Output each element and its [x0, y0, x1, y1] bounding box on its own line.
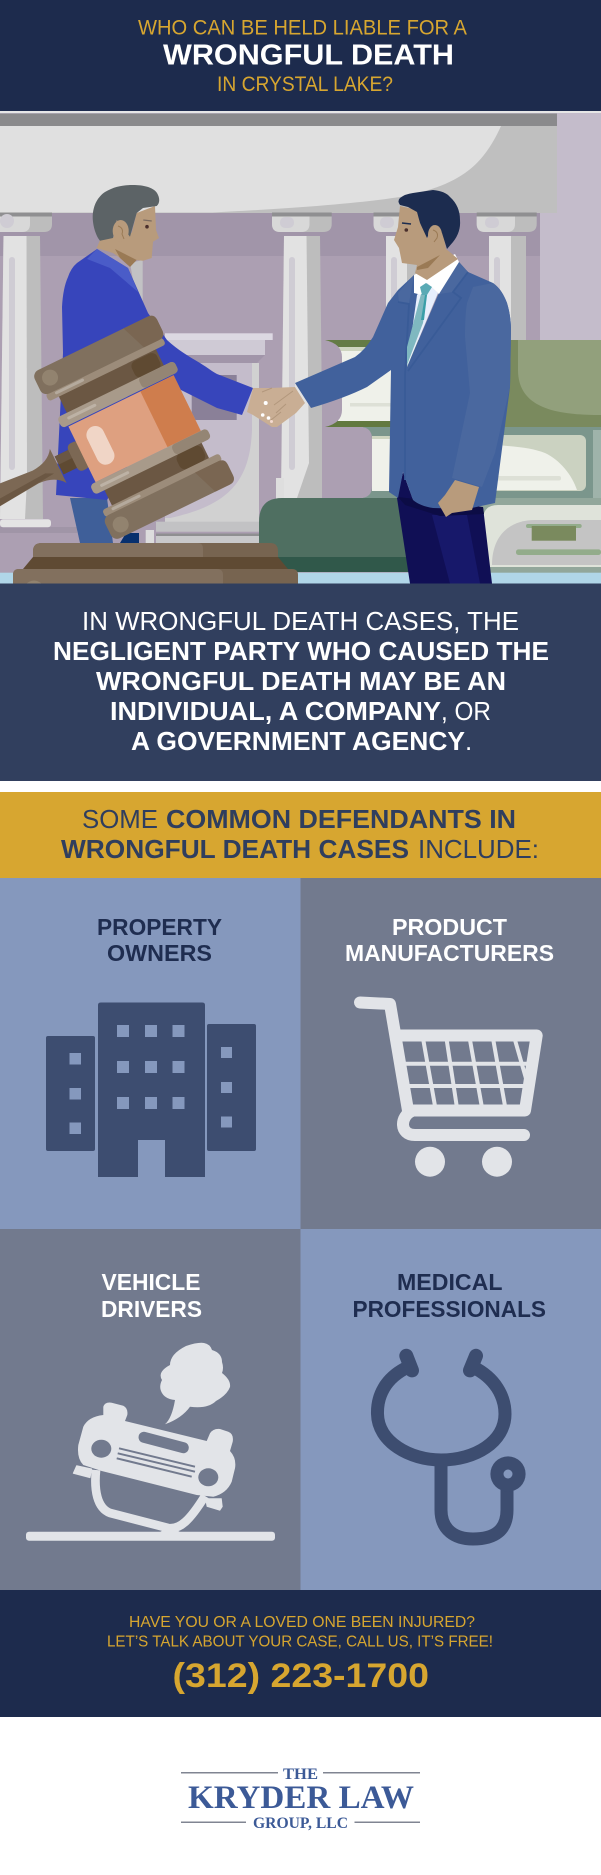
label: PROPERTY [97, 914, 222, 940]
title line 1: WHO CAN BE HELD LIABLE FOR A [138, 16, 467, 40]
panel: medical professionals [300, 1229, 601, 1590]
logo: The Kryder Law Group, LLC: KRYDER LAW [188, 1780, 414, 1816]
panel: property owners [0, 878, 300, 1229]
icon: overturned car with smoke [26, 1343, 275, 1541]
heading text [61, 804, 539, 864]
icon: gavel head and handle [0, 314, 236, 597]
panel: vehicle drivers [0, 1229, 300, 1590]
label [101, 1269, 202, 1322]
statement text: WRONGFUL DEATH MAY BE AN [96, 666, 506, 696]
statement text: IN WRONGFUL DEATH CASES, THE [82, 606, 519, 636]
label: VEHICLE [102, 1269, 200, 1295]
statement text [53, 606, 549, 756]
call to action footer [0, 1590, 601, 1717]
label: MEDICAL [397, 1269, 502, 1295]
logo: The Kryder Law Group, LLC [181, 1766, 420, 1832]
floor [0, 573, 601, 584]
label [97, 914, 222, 966]
label: PRODUCT [392, 914, 508, 940]
logo: The Kryder Law Group, LLC: THE [283, 1766, 318, 1783]
heading text: COMMON DEFENDANTS IN [166, 804, 516, 834]
title line 3: IN CRYSTAL LAKE? [217, 73, 393, 96]
call to action text: HAVE YOU OR A LOVED ONE BEEN INJURED? [129, 1614, 475, 1631]
call to action text line 2: LET’S TALK ABOUT YOUR CASE, CALL US, IT’S FREE! [107, 1634, 493, 1650]
icon: office buildings [46, 1002, 256, 1177]
title line 2: WRONGFUL DEATH [163, 40, 454, 72]
figure: left man in blue jacket [56, 185, 253, 543]
statement text: INDIVIDUAL, A COMPANY [110, 696, 441, 726]
icon: stethoscope [377, 1356, 526, 1539]
lectern behind figures [146, 333, 273, 544]
heading text: SOME [82, 804, 158, 834]
illustration: handshake in front of courthouse with gavel and law books [0, 111, 601, 597]
logo: The Kryder Law Group, LLC: GROUP, LLC [253, 1815, 348, 1832]
courthouse roof [0, 114, 557, 213]
columns [0, 212, 537, 527]
figure: right man in blue suit [295, 190, 511, 584]
heading text: WRONGFUL DEATH CASES [61, 834, 409, 864]
label: OWNERS [107, 940, 212, 966]
phone number: (312) 223-1700 [172, 1657, 429, 1695]
label: PROFESSIONALS [352, 1296, 546, 1322]
heading text: INCLUDE: [418, 834, 539, 864]
label [345, 914, 554, 966]
statement text: , OR [441, 696, 491, 726]
statement text: NEGLIGENT PARTY WHO CAUSED THE [53, 636, 549, 666]
panel: product manufacturers [300, 878, 601, 1229]
icon: shopping cart [360, 1002, 537, 1177]
panel: intro statement [0, 584, 601, 781]
icon: handshake [247, 387, 305, 427]
statement text: A GOVERNMENT AGENCY [131, 726, 465, 756]
statement text: . [465, 726, 472, 756]
panel: defendants heading [0, 792, 601, 878]
stacked law books [259, 340, 601, 573]
label: DRIVERS [101, 1296, 202, 1322]
label: MANUFACTURERS [345, 940, 554, 966]
header: title banner [0, 0, 601, 111]
icon: gavel sound block [13, 543, 298, 584]
courthouse wall [0, 212, 540, 584]
label [352, 1269, 546, 1322]
